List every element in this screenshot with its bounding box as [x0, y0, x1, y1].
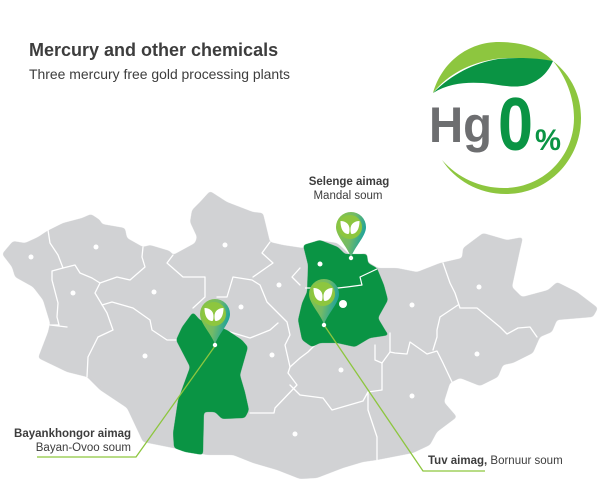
label: Bayankhongor — [14, 428, 131, 454]
label: Bayankhongor: Bayan-Ovoo soum — [36, 442, 131, 454]
river border between Selenge and Tuv — [305, 269, 377, 288]
map pin: Tuv — [309, 279, 339, 327]
leader line: Bayankhongor — [37, 346, 215, 457]
highlighted region: Bayankhongor aimag — [173, 312, 249, 455]
label: Tuv: Tuv aimag, Bornuur soum — [428, 455, 563, 467]
province centre dots — [28, 242, 482, 436]
logo leaf dark — [433, 58, 553, 93]
logo leaf light — [433, 42, 553, 93]
subtitle: Three mercury free gold processing plants — [29, 66, 290, 82]
logo text percent: % — [535, 124, 561, 157]
leader line: Tuv — [324, 325, 485, 471]
logo text Hg: Hg — [429, 97, 492, 153]
map pin: Bayankhongor — [200, 299, 230, 347]
logo ring — [442, 61, 581, 194]
title: Mercury and other chemicals — [29, 40, 278, 60]
map base — [2, 191, 598, 479]
label: Selenge: Selenge aimag — [309, 176, 389, 188]
aimag borders — [48, 230, 537, 460]
label: Selenge — [309, 176, 389, 202]
label: Bayankhongor: Bayankhongor aimag — [14, 428, 131, 440]
logo text 0: 0 — [498, 82, 533, 166]
map of Mongolia — [2, 191, 598, 479]
map pin: Selenge — [336, 212, 366, 260]
highlighted region: Selenge and Tuv aimags — [298, 240, 390, 347]
label: Selenge: Mandal soum — [313, 190, 383, 202]
icon: Hg 0% logo — [429, 42, 581, 194]
